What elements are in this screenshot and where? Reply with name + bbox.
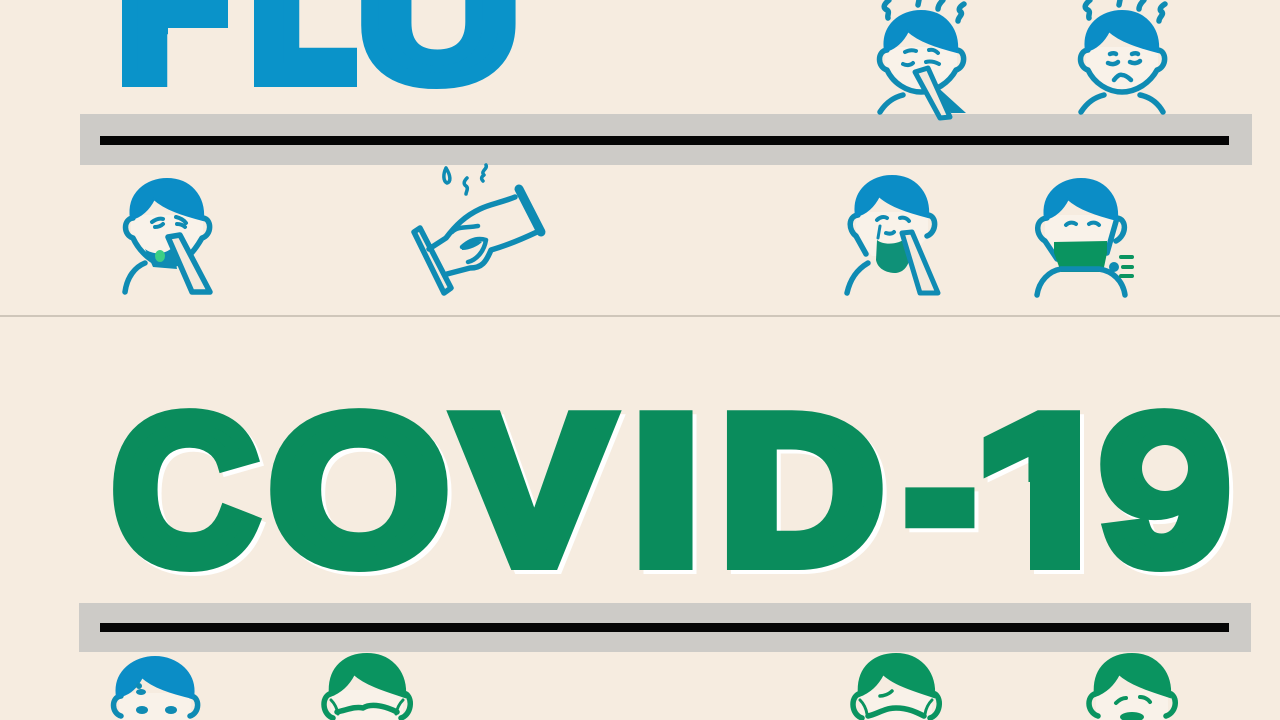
icon: covid masked face	[324, 654, 410, 720]
icon: flu-coloured forehead mark face	[114, 657, 198, 720]
icon: covid masked face, tired eye	[853, 654, 939, 720]
shelf: covid divider bar	[79, 603, 1251, 652]
icon: flu headache, tired face	[1080, 0, 1165, 112]
heading: FLU	[122, 0, 516, 89]
divider line between sections	[0, 315, 1280, 317]
heading: COVID-19: O	[270, 373, 448, 607]
heading: COVID-19: C	[113, 374, 257, 607]
heading: COVID-19: D	[720, 374, 884, 607]
heading: COVID-19: 9	[1101, 373, 1229, 607]
icon: flu runny nose, hand to face	[847, 176, 938, 293]
icon: flu headache with runny nose	[880, 0, 966, 118]
icon: flu sore throat	[125, 179, 210, 292]
icon: covid sad face	[1089, 654, 1175, 720]
heading: COVID-19: I	[633, 373, 699, 607]
heading: COVID-19: 1	[975, 374, 1127, 607]
shelf: flu divider bar	[80, 114, 1252, 165]
icon: flu hand washing glove with drops	[414, 165, 541, 293]
heading: COVID-19: V	[457, 373, 611, 607]
heading: COVID-19: -	[905, 374, 975, 607]
heading: COVID-19	[113, 408, 1234, 576]
icon: flu masked cough	[1037, 179, 1132, 295]
